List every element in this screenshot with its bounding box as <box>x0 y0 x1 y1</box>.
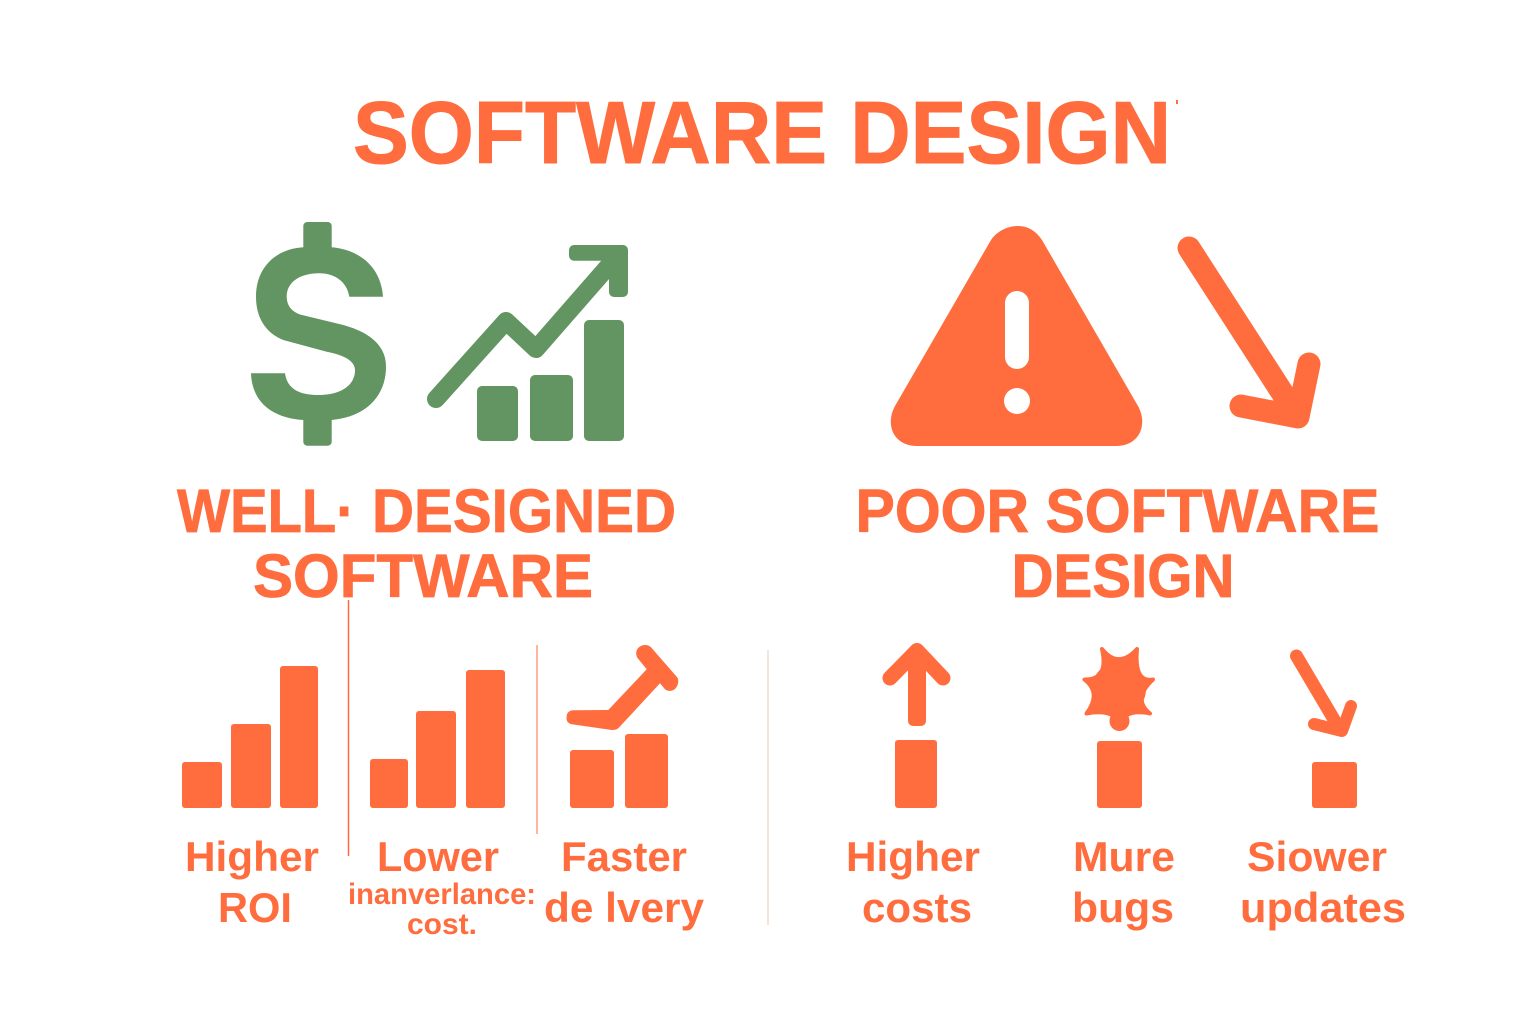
label: faster delivery: de lvery <box>544 884 705 931</box>
title: SOFTWARE DESIGN <box>353 83 1171 182</box>
label: slower updates <box>1240 833 1406 931</box>
label: slower updates: Siower <box>1247 833 1387 880</box>
icon: down arrow <box>1189 248 1309 417</box>
label: more bugs: bugs <box>1072 884 1174 931</box>
icon: slower updates arrow and bar <box>1296 656 1357 808</box>
label: slower updates: updates <box>1240 884 1406 931</box>
heading: well-designed software <box>177 477 676 610</box>
icon: faster delivery bars and arrow <box>566 645 678 808</box>
label: higher costs <box>846 833 980 931</box>
icon: growth chart <box>436 245 628 441</box>
icon: higher costs arrow and bar <box>890 650 943 808</box>
label: higher costs: Higher <box>846 833 980 880</box>
label: more bugs: Mure <box>1073 833 1175 880</box>
label: higher ROI: Higher <box>185 833 319 880</box>
icon: warning triangle <box>891 226 1142 446</box>
heading: well-designed software: DESIGNED <box>372 477 676 545</box>
label: lower inanverlance cost: inanverlance: <box>348 878 536 911</box>
icon: bug burst and bar <box>1084 649 1153 808</box>
label: higher costs: costs <box>862 884 972 931</box>
icon: lower cost bars <box>370 670 505 808</box>
label: faster delivery <box>544 833 705 931</box>
heading: poor software design: DESIGN <box>1012 542 1234 610</box>
heading: well-designed software: SOFTWARE <box>253 542 593 610</box>
icon: dollar sign <box>251 222 386 446</box>
label: higher ROI: ROI <box>218 884 292 931</box>
label: lower inanverlance cost <box>348 833 536 941</box>
heading: poor software design <box>856 477 1380 610</box>
heading: well-designed software: WELL· <box>177 477 355 545</box>
label: more bugs <box>1072 833 1175 931</box>
label: faster delivery: Faster <box>561 833 687 880</box>
heading: poor software design: POOR SOFTWARE <box>856 477 1380 545</box>
label: higher ROI <box>185 833 319 931</box>
label: lower inanverlance cost: Lower <box>377 833 499 880</box>
icon: higher ROI bars <box>182 666 318 808</box>
label: lower inanverlance cost: cost. <box>407 908 477 941</box>
